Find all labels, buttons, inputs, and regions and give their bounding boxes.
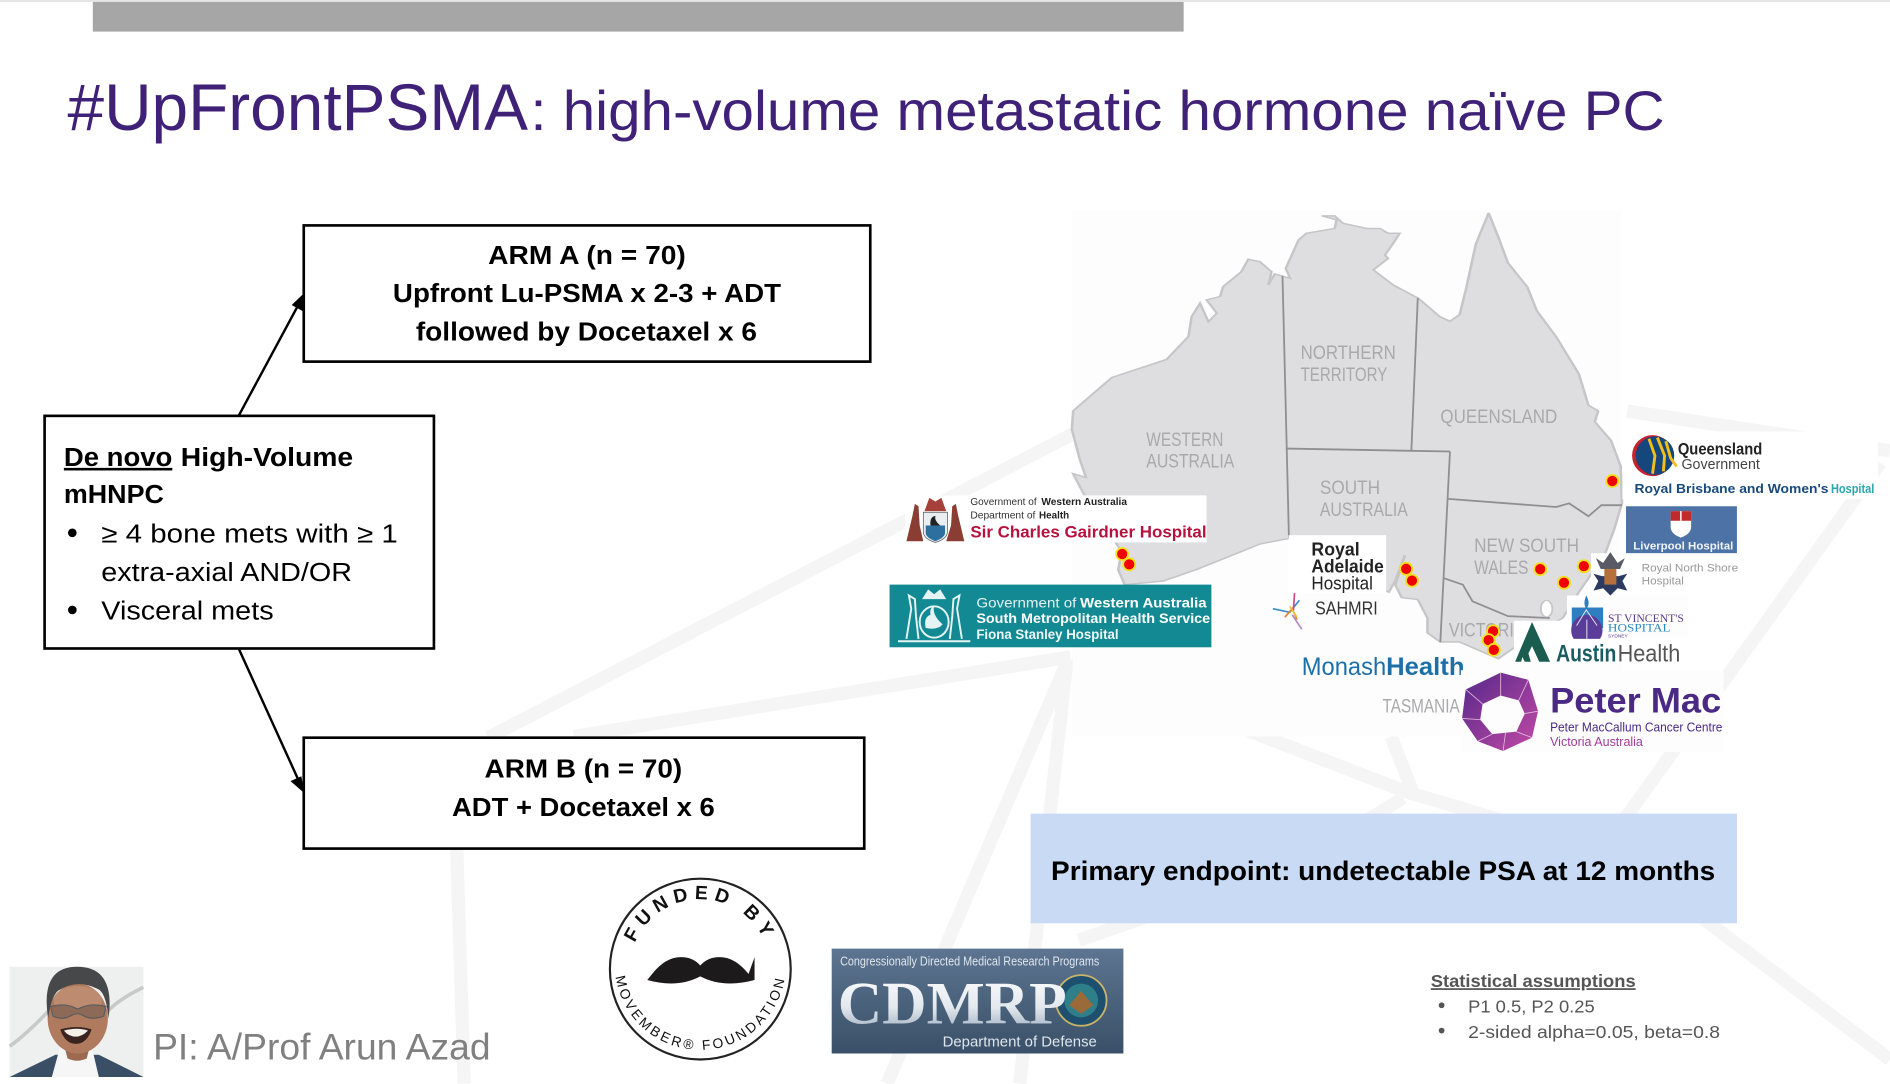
logo: CDMRP: Congressionally Directed Medical Research Programs xyxy=(840,955,1099,969)
logo: Royal Adelaide Hospital: Royal xyxy=(1311,539,1360,560)
panel: arm B xyxy=(304,738,864,849)
logo: CDMRP: CDMRP xyxy=(838,970,1067,1037)
logo: Peter Mac xyxy=(1461,670,1724,752)
title xyxy=(67,71,1665,144)
logo: St Vincent's Hospital: HOSPITAL xyxy=(1608,621,1671,635)
panel: arm B: ARM B (n = 70) xyxy=(485,755,682,783)
logo: Sir Charles Gairdner Hospital: Western Australia xyxy=(1041,497,1127,508)
callout: primary endpoint: Primary endpoint: undetectable PSA at 12 months xyxy=(1051,856,1715,886)
logo: Movember Foundation xyxy=(608,878,792,1061)
logo: Fiona Stanley Hospital: Government of xyxy=(976,595,1077,611)
logo: Liverpool Hospital xyxy=(1626,506,1737,553)
panel: arm B: ADT + Docetaxel x 6 xyxy=(452,794,715,822)
title: : high-volume metastatic hormone naïve PC xyxy=(530,80,1665,142)
text block: statistical assumptions: P1 0.5, P2 0.25 xyxy=(1468,997,1595,1017)
logo: Royal North Shore Hospital xyxy=(1591,552,1738,597)
logo: Fiona Stanley Hospital: South Metropolitan Health Service xyxy=(976,610,1210,626)
photo: principal investigator xyxy=(10,967,143,1077)
panel: arm A: followed by Docetaxel x 6 xyxy=(416,319,757,347)
panel: patient population: ≥ 4 bone mets with ≥ 1 xyxy=(101,520,398,548)
logo: Sir Charles Gairdner Hospital: Government of xyxy=(970,497,1037,508)
logo: Peter Mac: Peter Mac xyxy=(1550,681,1721,720)
callout: primary endpoint xyxy=(1031,814,1737,923)
map of Australia: AUSTRALIA xyxy=(1320,500,1408,521)
trial site markers xyxy=(1116,475,1618,656)
logo: Royal Adelaide Hospital: Hospital xyxy=(1311,572,1373,593)
logo: Queensland Government / Royal Brisbane and Women's Hospital: Royal Brisbane and Women's xyxy=(1634,482,1829,496)
text block: statistical assumptions: Statistical assumptions xyxy=(1431,971,1636,991)
logo: Peter Mac: Victoria Australia xyxy=(1550,735,1644,749)
logo: Royal Adelaide Hospital xyxy=(1289,535,1386,595)
panel: arm A: ARM A (n = 70) xyxy=(488,242,686,270)
logo: Royal Adelaide Hospital: Adelaide xyxy=(1311,556,1384,577)
panel: patient population xyxy=(45,416,434,648)
logo: St Vincent's Hospital: SYDNEY xyxy=(1608,634,1629,640)
panel: patient population: De novo xyxy=(64,444,172,472)
panel: arm A: Upfront Lu-PSMA x 2-3 + ADT xyxy=(393,280,781,308)
top grey bar xyxy=(0,0,1890,32)
logo: Fiona Stanley Hospital: Fiona Stanley Hospital xyxy=(976,626,1119,642)
logo: Monash Health: Health xyxy=(1386,653,1465,681)
logo: Monash Health: Monash xyxy=(1302,653,1386,681)
logo: Queensland Government / Royal Brisbane and Women's Hospital: Queensland xyxy=(1678,440,1762,458)
map of Australia: WESTERN xyxy=(1146,430,1223,451)
logo: Austin Health xyxy=(1514,621,1681,668)
logo: Royal North Shore Hospital: Royal North Shore xyxy=(1642,562,1738,574)
logo: Sir Charles Gairdner Hospital: Health xyxy=(1039,510,1069,521)
logo: CDMRP: Department of Defense xyxy=(943,1034,1097,1050)
text block: statistical assumptions xyxy=(1431,971,1720,1042)
panel: patient population: High-Volume xyxy=(181,444,353,472)
panel: patient population: Visceral mets xyxy=(101,598,274,626)
logo: Sir Charles Gairdner Hospital: Sir Charles Gairdner Hospital xyxy=(970,523,1207,542)
map of Australia: TERRITORY xyxy=(1301,365,1387,386)
panel: patient population: mHNPC xyxy=(64,481,164,509)
map of Australia: NORTHERN xyxy=(1301,343,1396,364)
arrow: to arm A xyxy=(239,293,304,416)
logo: SAHMRI: SAHMRI xyxy=(1315,598,1378,619)
panel: patient population: extra-axial AND/OR xyxy=(101,559,352,587)
logo: Movember Foundation: MOVEMBER® FOUNDATION xyxy=(616,976,784,1050)
logo: Queensland Government / Royal Brisbane and Women's Hospital: Hospital xyxy=(1831,482,1874,496)
logo: Queensland Government / Royal Brisbane and Women's Hospital xyxy=(1622,432,1878,499)
logo: Queensland Government / Royal Brisbane and Women's Hospital: Government xyxy=(1681,456,1761,473)
logo: Liverpool Hospital: Liverpool Hospital xyxy=(1633,541,1733,553)
logo: Peter Mac: Peter MacCallum Cancer Centre xyxy=(1550,721,1722,735)
arrow: to arm B xyxy=(239,648,304,793)
logo: Monash Health xyxy=(1297,651,1466,682)
logo: Austin Health: Health xyxy=(1618,641,1680,668)
logo: Royal North Shore Hospital: Hospital xyxy=(1642,576,1684,588)
map of Australia xyxy=(1072,213,1622,717)
map of Australia: QUEENSLAND xyxy=(1440,407,1557,428)
text block: principal investigator: PI: A/Prof Arun Azad xyxy=(153,1026,491,1068)
map of Australia: SOUTH xyxy=(1320,478,1380,499)
logo: St Vincent's Hospital xyxy=(1567,595,1688,646)
panel: arm A xyxy=(304,225,870,362)
logo: Movember Foundation: FUNDED BY xyxy=(624,886,774,942)
map of Australia: VICTORI xyxy=(1449,620,1514,641)
logo: Sir Charles Gairdner Hospital xyxy=(905,495,1207,542)
logo: Fiona Stanley Hospital: Western Australia xyxy=(1080,595,1207,611)
map of Australia: WALES xyxy=(1474,558,1528,579)
logo: Sir Charles Gairdner Hospital: Department of xyxy=(970,510,1036,521)
text block: statistical assumptions: 2-sided alpha=0.05, beta=0.8 xyxy=(1468,1022,1720,1042)
map of Australia: TASMANIA xyxy=(1383,696,1460,717)
logo: SAHMRI xyxy=(1269,593,1386,632)
logo: CDMRP xyxy=(832,949,1123,1053)
logo: Fiona Stanley Hospital xyxy=(890,585,1211,647)
logo: St Vincent's Hospital: ST VINCENT'S xyxy=(1608,611,1684,625)
map of Australia: AUSTRALIA xyxy=(1146,452,1234,473)
logo: Austin Health: Austin xyxy=(1556,641,1616,668)
title: #UpFrontPSMA xyxy=(67,71,528,144)
map of Australia: NEW SOUTH xyxy=(1474,536,1579,557)
